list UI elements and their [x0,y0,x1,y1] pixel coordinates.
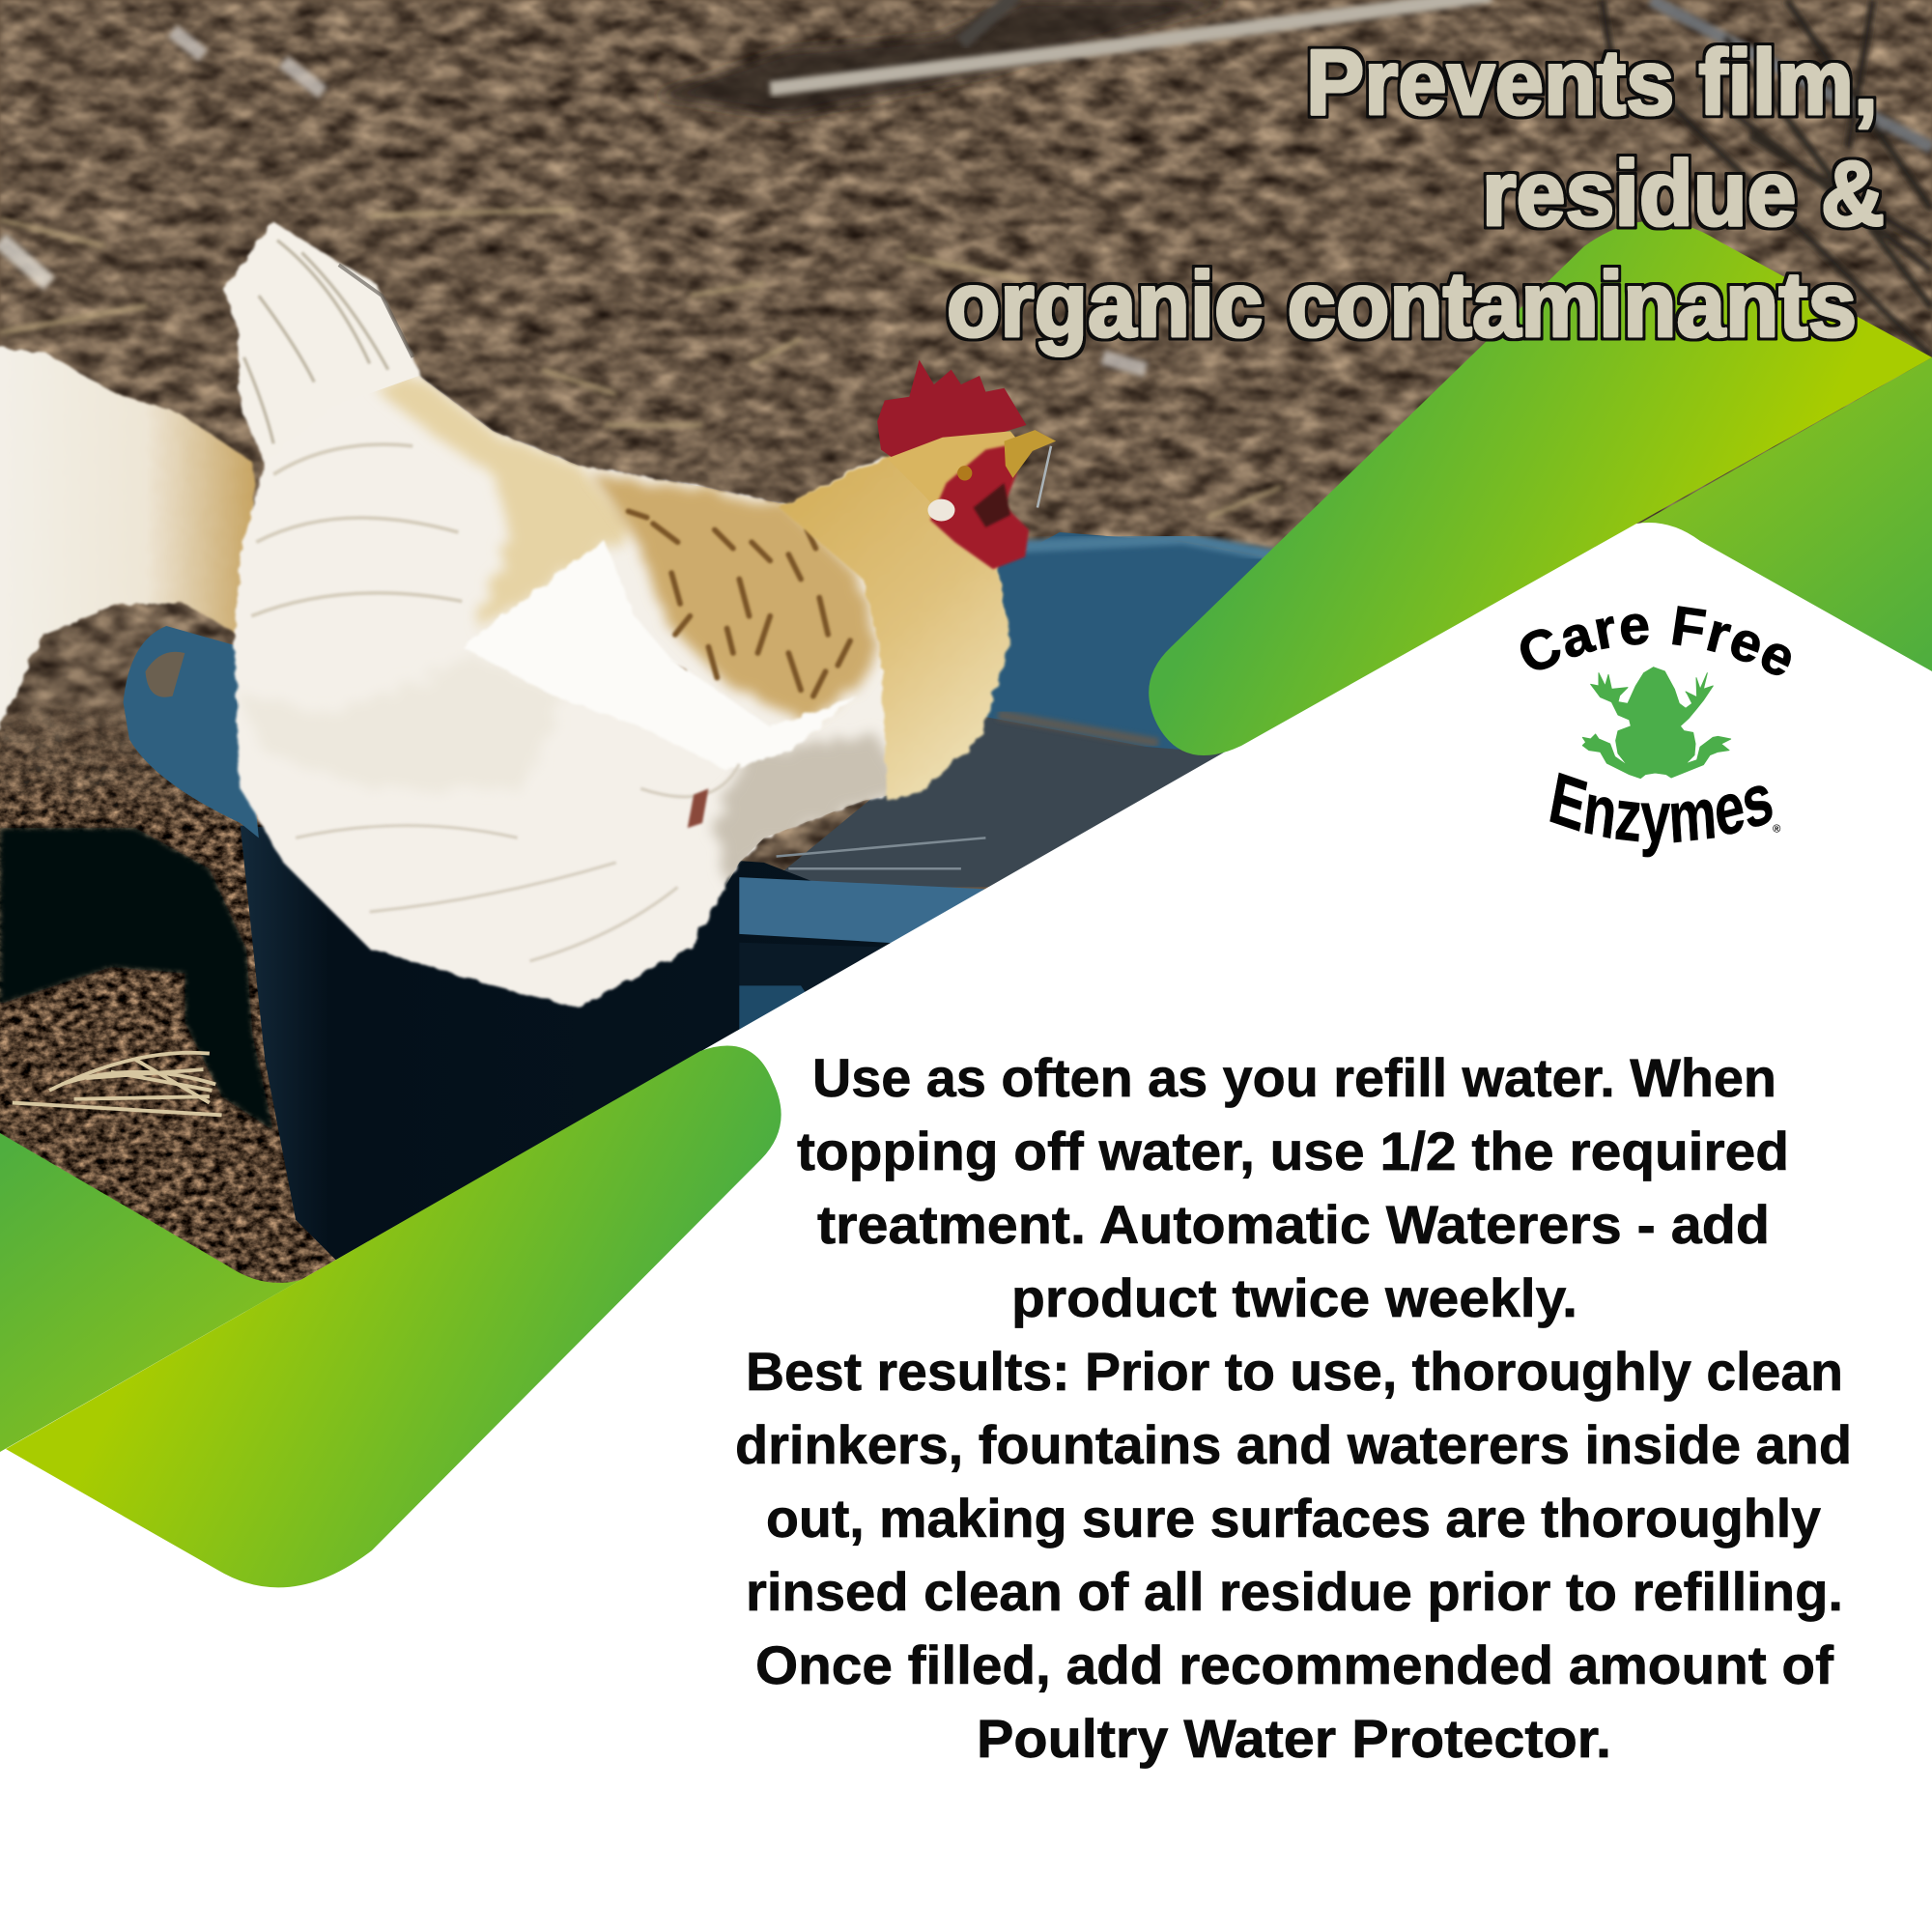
wing feather edges [251,444,462,616]
body text: treatment. Automatic Waterers - add [817,1194,1770,1255]
heading: Prevents film, [1306,31,1878,134]
beak [1005,430,1056,478]
straw highlights [0,31,1282,518]
tub outer body [241,826,985,1269]
heading [947,31,1885,356]
lower body shading [715,733,905,887]
main hen [224,222,1056,1008]
photo: hen at blue water tub [0,0,1932,1283]
body text: Use as often as you refill water. When [812,1047,1776,1108]
ear lobe [927,499,955,522]
pipe and shadow at top [653,0,1491,117]
head [887,431,1023,542]
heading: residue & [1482,142,1885,245]
blue tub [124,532,1282,1269]
front green shape, lower left [6,1045,781,1587]
straw tuft [13,1053,222,1115]
heading: organic contaminants [947,253,1857,356]
wing shading [234,653,567,788]
blended plumage patches [234,376,905,887]
soil texture, foreground ground [0,707,336,1283]
back green band, upper right [1507,357,1932,676]
cream back feathers [376,376,635,629]
body text: topping off water, use 1/2 the required [797,1121,1789,1181]
icon: green frog [1582,668,1731,779]
front green shape, upper right [1149,221,1932,755]
body text: drinkers, fountains and waterers inside and [735,1414,1852,1475]
back green band, lower left [0,1133,314,1454]
golden neck [779,446,1010,801]
body text: product twice weekly. [1011,1267,1577,1328]
wire fence, top right [1602,0,1932,357]
white wing [462,540,856,770]
body text: rinsed clean of all residue prior to refilling. [746,1561,1843,1622]
water surface [764,715,1282,887]
soil texture, blurred background [0,0,1932,869]
left hen [0,343,259,739]
eye [957,466,972,480]
feather edge lines [296,764,739,961]
red spot [688,788,708,828]
white content panel [0,523,1932,1932]
body text: Once filled, add recommended amount of [755,1634,1833,1695]
logo text: Care Free: Care Free [1520,606,1791,676]
body text [735,1047,1852,1769]
body text: Best results: Prior to use, thoroughly clean [746,1341,1843,1402]
tub back rim and inner wall [974,532,1282,788]
logo: Care Free Enzymes [1520,606,1791,858]
speckles [629,511,850,696]
tub left handle rim [124,626,259,838]
registered mark: ® [1773,824,1781,836]
ground shadow [0,828,273,1131]
body text: Poultry Water Protector. [977,1708,1611,1769]
body text: out, making sure surfaces are thoroughly [766,1488,1821,1548]
logo text: Enzymes: Enzymes [1549,773,1773,858]
speckled shoulder [591,474,877,721]
face and wattle [930,443,1029,569]
comb [877,359,1026,458]
tub front rim [739,877,998,947]
body [234,376,1005,1008]
tail feathers [224,222,425,470]
